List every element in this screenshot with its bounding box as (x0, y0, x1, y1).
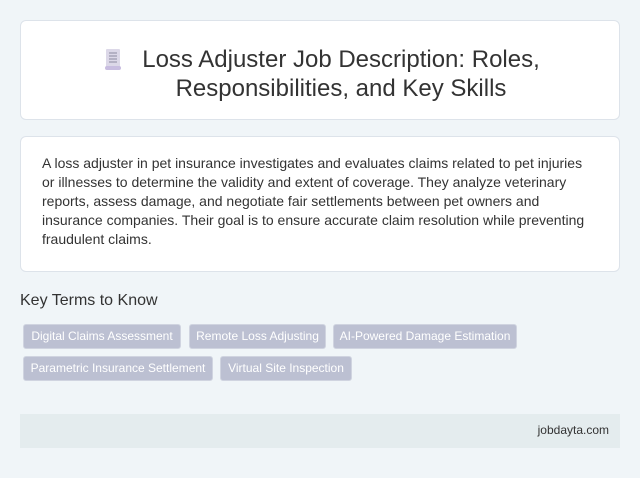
tag 3: AI-Powered Damage Estimation (340, 329, 510, 343)
footer text: jobdayta.com (538, 423, 609, 437)
icon: document (105, 49, 121, 70)
tag 2: Remote Loss Adjusting (196, 329, 319, 343)
title: Loss Adjuster Job Description: Roles, Responsibilities, and Key Skills (142, 46, 540, 102)
tag 5: Virtual Site Inspection (228, 361, 344, 375)
header card (20, 20, 620, 120)
key terms heading: Key Terms to Know (20, 292, 158, 309)
tag 4 (23, 356, 213, 381)
footer (20, 414, 620, 448)
description card (20, 136, 620, 272)
tag 1: Digital Claims Assessment (31, 329, 173, 343)
tag 2 (189, 324, 326, 349)
tag 3 (333, 324, 517, 349)
tag 5 (220, 356, 352, 381)
tag 4: Parametric Insurance Settlement (31, 361, 205, 375)
description text: A loss adjuster in pet insurance investigates and evaluates claims related to pet injuries or illnesses to determine the validity and extent of coverage. They analyze veterinary reports, assess damage, and negotiate fair settlements between pet owners and insurance companies. Their goal is to ensure accurate claim resolution while preventing fraudulent claims. (42, 155, 584, 247)
tag 1 (23, 324, 181, 349)
